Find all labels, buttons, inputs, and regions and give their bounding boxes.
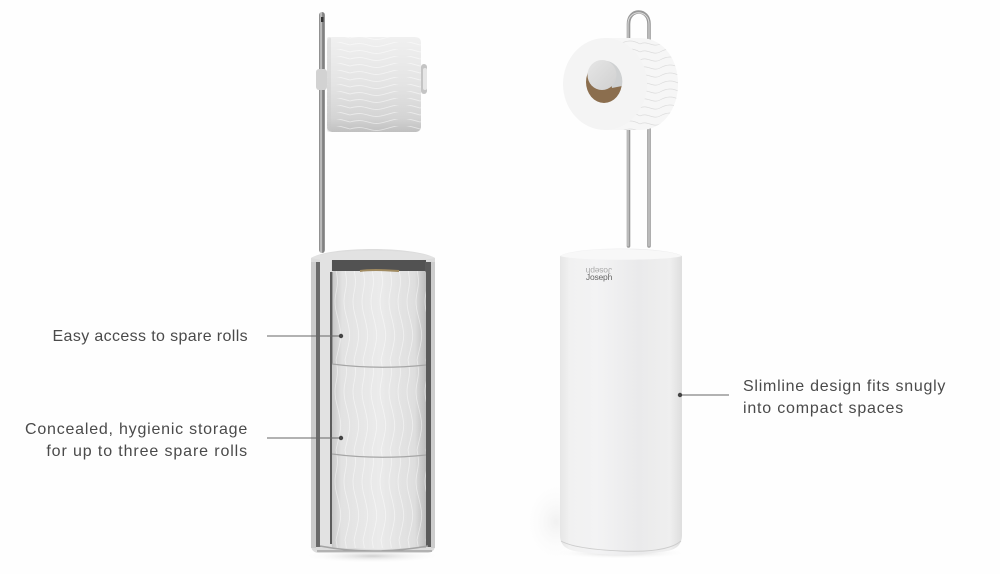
- spare roll 1: [333, 270, 426, 367]
- callout: concealed storage: for up to three spare rolls: [46, 443, 248, 460]
- left holder: stem: [319, 12, 325, 253]
- left holder: toilet roll: [327, 37, 421, 132]
- leader: slimline: [678, 393, 729, 397]
- left canister: cutaway body: [311, 249, 435, 553]
- callout: slimline design: Slimline design fits snugly: [743, 378, 946, 395]
- brand logo: Joseph: [585, 266, 612, 276]
- spare roll 2: [332, 364, 426, 458]
- right canister: white body: [560, 248, 682, 555]
- callout: slimline design: into compact spaces: [743, 400, 904, 417]
- callout: easy access: Easy access to spare rolls: [53, 328, 248, 345]
- right holder: toilet roll: [563, 38, 678, 130]
- right holder: wire loop: [628, 12, 649, 246]
- left canister: base ring: [317, 546, 432, 551]
- brand logo: [585, 266, 613, 282]
- brand logo: Joseph: [586, 272, 613, 282]
- callout: concealed storage: Concealed, hygienic storage: [25, 421, 248, 438]
- leader: concealed storage: [267, 436, 343, 440]
- leader: easy access: [267, 334, 343, 338]
- left canister: three spare rolls: [332, 270, 426, 550]
- roll core hole: [586, 61, 622, 103]
- callout: concealed storage: [25, 421, 248, 460]
- spare roll 3: [332, 454, 426, 550]
- right canister: cast shadow: [522, 478, 590, 566]
- spindle cap: [588, 60, 616, 90]
- left canister: floor shadow: [300, 549, 444, 563]
- left holder: spindle pegs: [316, 64, 427, 94]
- right canister: floor shadow: [553, 547, 689, 559]
- callout: slimline design: [743, 378, 946, 417]
